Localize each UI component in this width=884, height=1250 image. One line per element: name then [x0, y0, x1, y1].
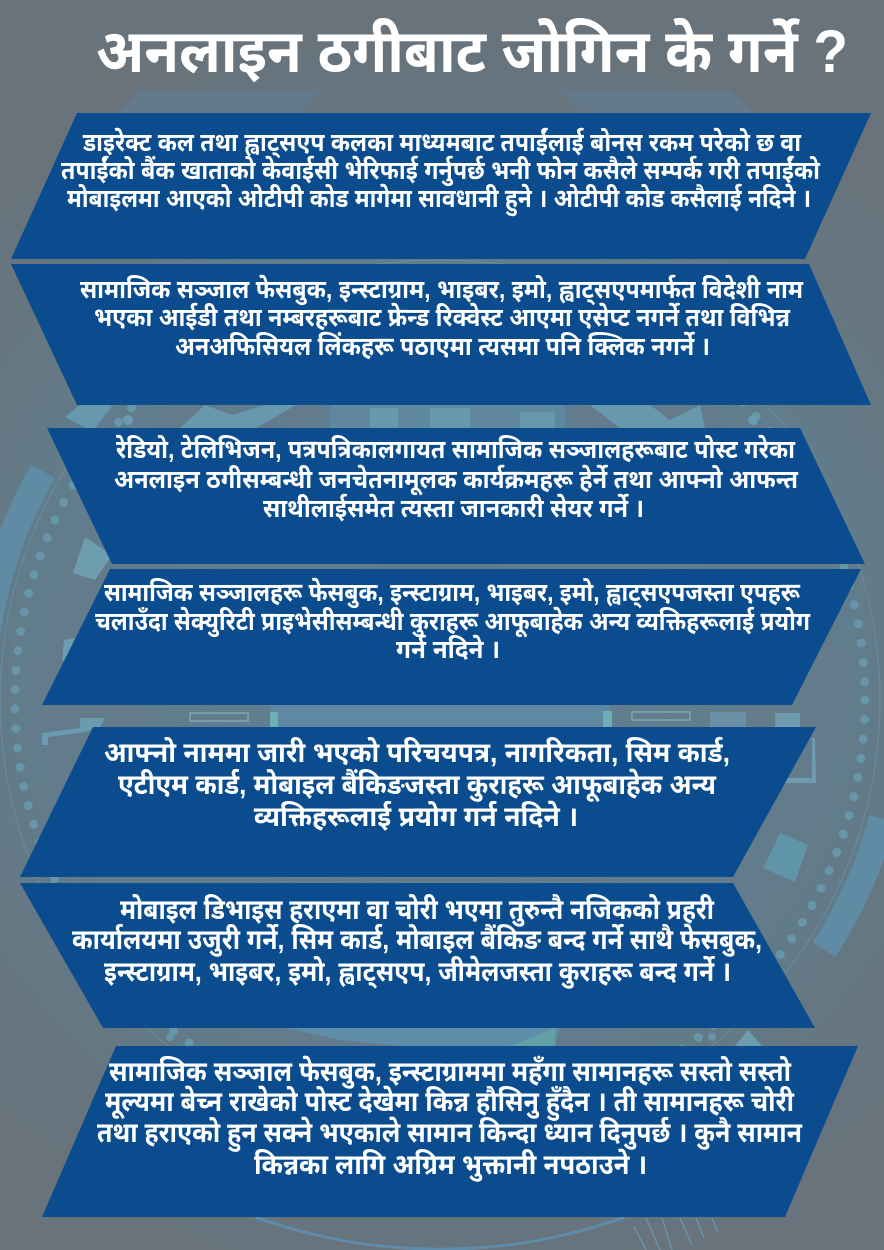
- panel: 4 app privacy: [42, 569, 861, 705]
- panel: 1 OTP warning: [11, 113, 871, 259]
- panel: 3 awareness programmes: रेडियो, टेलिभिजन, पत्रपत्रिकालगायत सामाजिक सञ्जालहरूबाट पोस्ट गरेका: [115, 434, 796, 464]
- panel: 7 cheap goods warning: किन्नका लागि अग्रिम भुक्तानी नपठाउने ।: [254, 1147, 647, 1182]
- panel: 2 foreign friend requests: सामाजिक सञ्जाल फेसबुक, इन्स्टाग्राम, भाइबर, इमो, ह्वाट्सएपमार्फत विदेशी नाम: [80, 274, 804, 305]
- panel: 6 lost device: कार्यालयमा उजुरी गर्ने, सिम कार्ड, मोबाइल बैंकिङ बन्द गर्ने साथै फेसबुक,: [72, 922, 762, 957]
- title: अनलाइन ठगीबाट जोगिन के गर्ने ?: [96, 18, 848, 85]
- panel: 3 awareness programmes: [47, 428, 865, 564]
- panel: 5 identity documents: आफ्नो नाममा जारी भएको परिचयपत्र, नागरिकता, सिम कार्ड,: [104, 736, 730, 768]
- panel: 4 app privacy: गर्न नदिने ।: [396, 634, 500, 664]
- panel: 2 foreign friend requests: भएका आईडी तथा नम्बरहरूबाट फ्रेन्ड रिक्वेस्ट आएमा एसेप्ट नगर्ने तथा विभिन्न: [94, 302, 791, 332]
- panel: 7 cheap goods warning: [42, 1046, 858, 1217]
- panel: 2 foreign friend requests: अनअफिसियल लिंकहरू पठाएमा त्यसमा पनि क्लिक नगर्ने ।: [175, 331, 710, 361]
- panel: 6 lost device: मोबाइल डिभाइस हराएमा वा चोरी भएमा तुरुन्तै नजिकको प्रहरी: [120, 893, 715, 927]
- panel: 5 identity documents: एटीएम कार्ड, मोबाइल बैंकिङजस्ता कुराहरू आफूबाहेक अन्य: [118, 767, 717, 802]
- panel: 7 cheap goods warning: सामाजिक सञ्जाल फेसबुक, इन्स्टाग्राममा महँगा सामानहरू सस्तो सस्तो: [109, 1054, 792, 1089]
- panel: 7 cheap goods warning: मूल्यमा बेच्न राखेको पोस्ट देखेमा किन्न हौसिनु हुँदैन । ती सामानहरू चोरी: [105, 1084, 795, 1121]
- panel: 5 identity documents: [20, 727, 816, 877]
- panel: 1 OTP warning: डाइरेक्ट कल तथा ह्वाट्सएप कलका माध्यमबाट तपाईंलाई बोनस रकम परेको छ वा: [82, 127, 802, 158]
- panel: 2 foreign friend requests: [11, 264, 871, 405]
- panel: 5 identity documents: व्यक्तिहरूलाई प्रयोग गर्न नदिने ।: [253, 799, 578, 832]
- panel: 6 lost device: [20, 883, 815, 1028]
- panel: 3 awareness programmes: अनलाइन ठगीसम्बन्धी जनचेतनामूलक कार्यक्रमहरू हेर्ने तथा आफ्नो आफन्त: [114, 464, 799, 496]
- panel: 7 cheap goods warning: तथा हराएको हुन सक्ने भएकाले सामान किन्दा ध्यान दिनुपर्छ । कुनै सामान: [97, 1115, 803, 1152]
- panel: 6 lost device: इन्स्टाग्राम, भाइबर, इमो, ह्वाट्सएप, जीमेलजस्ता कुराहरू बन्द गर्ने ।: [104, 954, 731, 989]
- panel: 4 app privacy: सामाजिक सञ्जालहरू फेसबुक, इन्स्टाग्राम, भाइबर, इमो, ह्वाट्सएपजस्ता एपहरू: [104, 577, 801, 608]
- panel: 3 awareness programmes: साथीलाईसमेत त्यस्ता जानकारी सेयर गर्ने ।: [263, 493, 644, 523]
- panel: 4 app privacy: चलाउँदा सेक्युरिटी प्राइभेसीसम्बन्धी कुराहरू आफूबाहेक अन्य व्यक्तिहरूलाई प्रयोग: [95, 606, 811, 638]
